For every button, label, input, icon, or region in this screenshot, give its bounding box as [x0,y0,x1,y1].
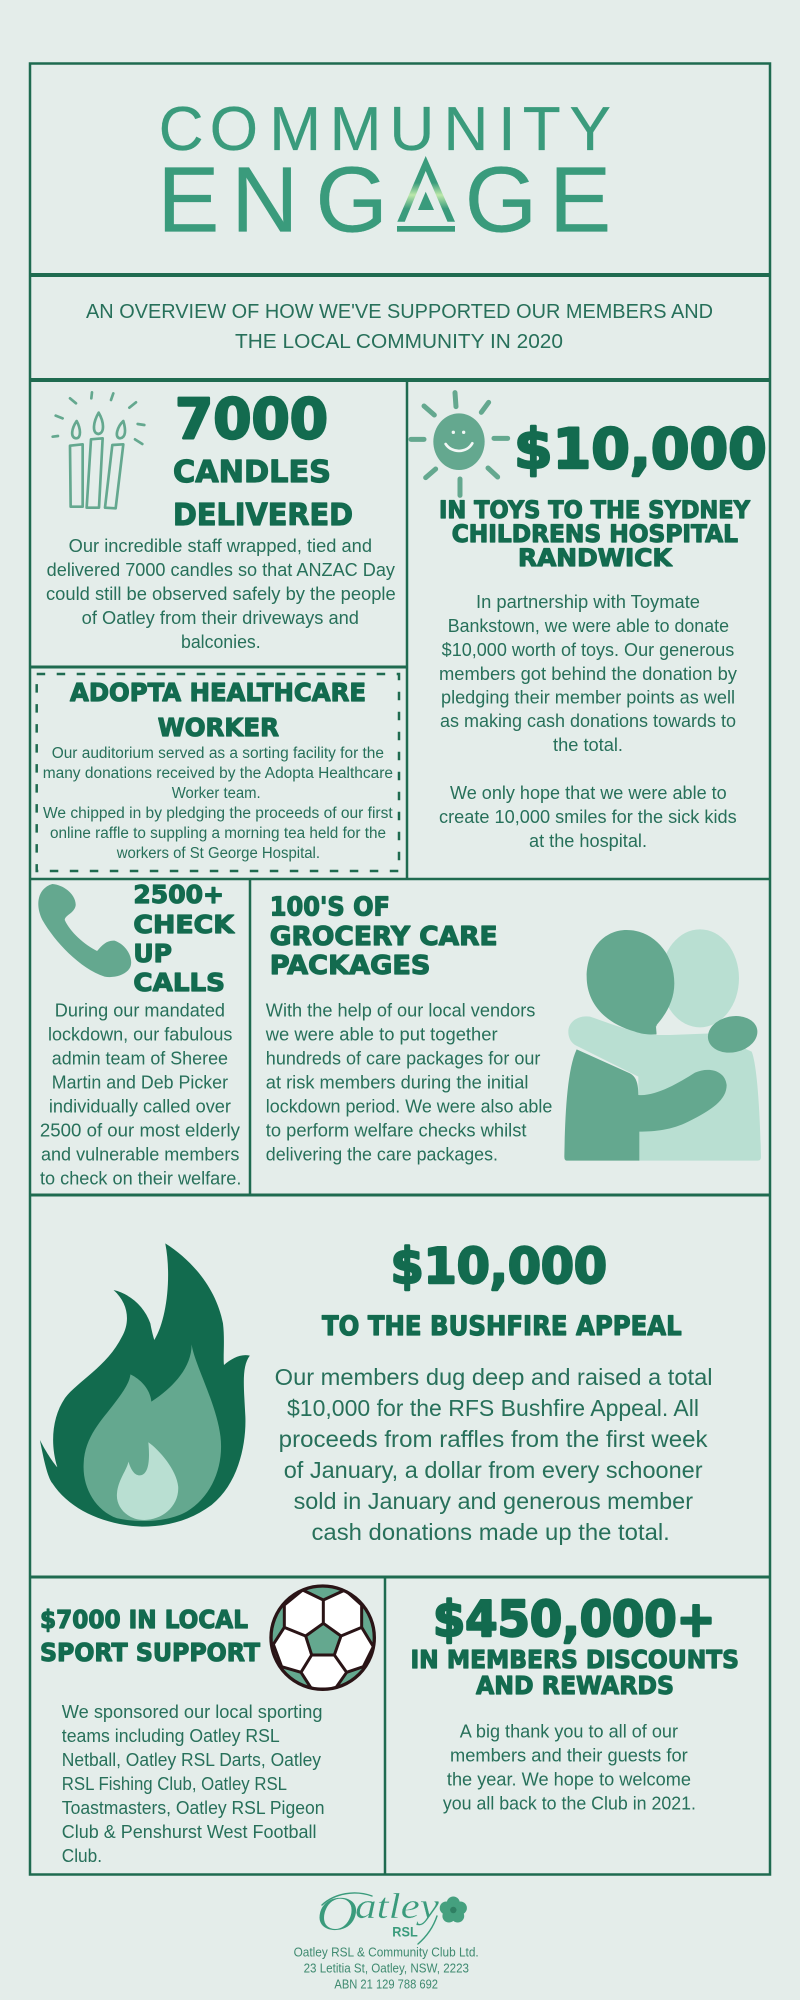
heading: sport: $7000 IN LOCAL [40,1605,248,1634]
icon: phone [38,884,131,977]
text: bushfire body: $10,000 for the RFS Bushfire Appeal. All [287,1395,699,1421]
text: toys body: We only hope that we were able to [450,783,727,803]
heading: 7000 candles delivered: 7000 [175,387,328,451]
heading: grocery [270,893,498,981]
heading: $10,000 in toys: $10,000 [514,417,767,481]
text: candles body: delivered 7000 candles so that ANZAC Day [47,560,395,580]
heading: grocery: GROCERY CARE [270,922,498,952]
text: grocery body [265,1001,552,1165]
icon: soccer ball [267,1583,380,1695]
text: bushfire body: Our members dug deep and raised a total [275,1364,712,1390]
text: grocery body: to perform welfare checks whilst [266,1121,526,1141]
text: discounts body: members and their guests for [450,1746,688,1766]
text: adopta body: Worker team. [172,785,261,802]
text: calls body: Martin and Deb Picker [52,1073,228,1093]
footer address: Oatley RSL & Community Club Ltd. [294,1945,479,1960]
text: adopta body: workers of St George Hospital. [116,845,320,862]
heading: 2500+ check up calls: UP [133,939,172,968]
heading: bushfire [322,1238,682,1342]
logo: Oatley RSL [316,1885,467,1944]
panel: member discounts [410,1591,739,1814]
heading: $10,000 in toys: IN TOYS TO THE SYDNEY [439,496,751,524]
heading: $450,000+: AND REWARDS [476,1671,674,1700]
text: discounts body: the year. We hope to welcome [447,1770,691,1790]
text: sport body [62,1702,325,1866]
text: adopta body: many donations received by the Adopta Healthcare [43,765,393,782]
logo: Oatley RSL: O [316,1885,358,1941]
text: candles body: balconies. [181,632,261,652]
text: sport body: Netball, Oatley RSL Darts, Oatley [62,1750,321,1770]
heading: $10,000 in toys: RANDWICK [518,544,673,572]
text: sport body: Club & Penshurst West Football [62,1822,316,1842]
heading: 7000 candles delivered: DELIVERED [173,498,353,533]
text: grocery body: With the help of our local vendors [266,1001,535,1021]
text: calls body [40,1001,241,1189]
heading: $450,000+ [410,1591,739,1700]
heading: 7000 candles delivered: CANDLES [173,455,331,490]
text: candles body: of Oatley from their driveways and [82,608,359,628]
panel: check up calls [38,880,241,1189]
text: calls body: 2500 of our most elderly [40,1121,240,1141]
text: calls body: admin team of Sheree [52,1049,228,1069]
logo: Oatley RSL: atley [355,1886,439,1926]
text: toys body: pledging their member points as well [441,688,735,708]
text: toys body: $10,000 worth of toys. Our generous [442,640,734,660]
footer address: 23 Letitia St, Oatley, NSW, 2223 [304,1961,469,1976]
heading: adopta: WORKER [158,713,279,742]
text: adopta body: Our auditorium served as a sorting facility for the [52,745,384,762]
title: GE [465,148,611,252]
heading: $10,000 in toys: CHILDRENS HOSPITAL [452,520,738,548]
text: calls body: individually called over [49,1097,231,1117]
text: toys body: Bankstown, we were able to donate [448,616,729,636]
heading: 7000 candles delivered [173,387,353,533]
text: toys body [439,592,737,851]
text: calls body: During our mandated [55,1001,225,1021]
text: calls body: and vulnerable members [41,1145,239,1165]
text: sport body: Toastmasters, Oatley RSL Pigeon [62,1798,325,1818]
text: toys body: members got behind the donation by [439,664,737,684]
heading: 2500+ check up calls [133,880,236,997]
panel: adopta healthcare worker [37,674,399,871]
text: calls body: lockdown, our fabulous [48,1025,232,1045]
text: sport body: We sponsored our local sporting [62,1702,323,1722]
text: grocery body: delivering the care packages. [266,1145,498,1165]
text: toys body: at the hospital. [529,831,647,851]
heading: adopta [70,678,366,742]
text: grocery body: lockdown period. We were also able [266,1097,552,1117]
text: sport body: teams including Oatley RSL [62,1726,280,1746]
text: adopta body: online raffle to suppling a morning tea held for the [50,825,386,842]
subtitle [86,301,713,353]
text: grocery body: we were able to put together [265,1025,498,1045]
icon: candles [53,392,144,508]
title: COMMUNITY [159,95,611,164]
text: candles body: Our incredible staff wrapped, tied and [69,536,372,556]
heading: grocery: 100'S OF [270,893,390,923]
text: candles body [46,536,396,652]
heading: sport: SPORT SUPPORT [40,1638,260,1667]
footer address: ABN 21 129 788 692 [334,1977,438,1992]
heading: 2500+ check up calls: CHECK [133,910,236,939]
heading: grocery: PACKAGES [270,951,430,981]
text: toys body: as making cash donations towards to [440,711,736,731]
heading: 2500+ check up calls: CALLS [133,968,225,997]
heading: 2500+ check up calls: 2500+ [133,880,224,909]
text: calls body: to check on their welfare. [40,1169,241,1189]
panel: toys [411,393,767,851]
text: bushfire body: proceeds from raffles from the first week [279,1426,708,1452]
text: toys body: create 10,000 smiles for the sick kids [439,807,737,827]
subtitle: AN OVERVIEW OF HOW WE'VE SUPPORTED OUR MEMBERS AND [86,301,713,323]
text: discounts body: you all back to the Club in 2021. [443,1794,696,1814]
subtitle: THE LOCAL COMMUNITY IN 2020 [235,331,563,353]
heading: $450,000+: IN MEMBERS DISCOUNTS [410,1645,739,1674]
text: bushfire body [275,1364,712,1545]
text: grocery body: hundreds of care packages for our [266,1049,540,1069]
icon: hugging people [564,929,761,1161]
heading: $10,000 in toys [439,417,767,572]
heading: bushfire: TO THE BUSHFIRE APPEAL [322,1311,682,1342]
icon: flower [440,1896,467,1922]
heading: adopta: ADOPTA HEALTHCARE [70,678,366,707]
footer address [294,1945,479,1992]
text: grocery body: at risk members during the initial [266,1073,528,1093]
icon: smiling sun [411,393,508,495]
panel: sport support [40,1583,380,1866]
title [157,95,611,252]
panel: grocery care packages [265,893,761,1165]
heading: bushfire: $10,000 [391,1238,607,1295]
panel: candles [46,387,396,652]
text: toys body: In partnership with Toymate [476,592,700,612]
text: candles body: could still be observed safely by the people [46,584,396,604]
panel: bushfire appeal [40,1238,712,1545]
text: sport body: RSL Fishing Club, Oatley RSL [62,1774,287,1794]
text: bushfire body: sold in January and generous member [294,1488,693,1514]
text: bushfire body: cash donations made up the total. [312,1519,670,1545]
heading: $450,000+: $450,000+ [433,1591,716,1648]
text: sport body: Club. [62,1846,102,1866]
logo: Oatley RSL: RSL [392,1924,418,1940]
text: toys body: the total. [553,735,623,755]
text: adopta body: We chipped in by pledging the proceeds of our first [43,805,393,822]
icon: flame [40,1243,250,1527]
text: adopta body [43,745,393,862]
text: discounts body: A big thank you to all of our [460,1722,678,1742]
title: ENG [157,148,388,252]
text: discounts body [443,1722,696,1814]
heading: sport [40,1605,260,1667]
text: bushfire body: of January, a dollar from every schooner [284,1457,703,1483]
